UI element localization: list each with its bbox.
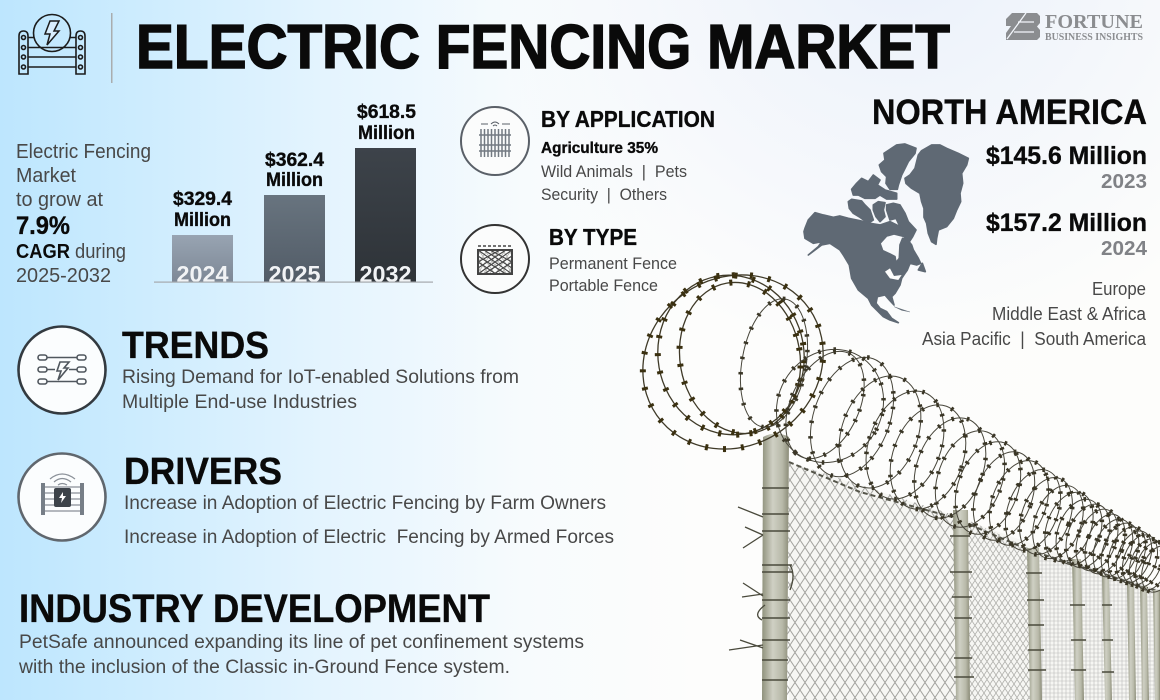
bar 2025: Million bbox=[266, 170, 323, 191]
by application text: Wild Animals | Pets bbox=[541, 162, 687, 181]
other regions: Middle East & Africa bbox=[992, 304, 1147, 324]
logo: Fortune Business Insights: FORTUNE bbox=[1045, 11, 1143, 33]
CAGR text block: 2025-2032 bbox=[16, 265, 111, 287]
by application text: BY APPLICATION bbox=[541, 106, 715, 132]
bar chart bbox=[154, 102, 433, 287]
North America stats: $157.2 Million bbox=[986, 209, 1147, 237]
North America stats: $145.6 Million bbox=[986, 142, 1147, 170]
CAGR text block: CAGR during bbox=[16, 241, 126, 263]
North America stats: 2024 bbox=[1101, 238, 1148, 260]
trends text: Rising Demand for IoT-enabled Solutions from bbox=[122, 366, 519, 388]
bar 2024: $329.4 bbox=[173, 189, 232, 210]
by type text bbox=[549, 224, 677, 295]
icon: by type bbox=[461, 225, 529, 293]
by application text: Security | Others bbox=[541, 185, 667, 204]
North America stats bbox=[872, 93, 1148, 260]
other regions: Europe bbox=[1092, 279, 1146, 299]
bar 2032: Million bbox=[358, 123, 415, 144]
fence photo illustration bbox=[609, 240, 1160, 700]
industry development: with the inclusion of the Classic in-Ground Fence system. bbox=[18, 656, 510, 678]
bar 2025 bbox=[264, 150, 325, 287]
drivers text: Increase in Adoption of Electric Fencing by Farm Owners bbox=[124, 492, 606, 514]
logo: Fortune Business Insights: BUSINESS INSIGHTS bbox=[1045, 32, 1143, 43]
by type text: Portable Fence bbox=[549, 276, 658, 295]
industry development: PetSafe announced expanding its line of pet confinement systems bbox=[19, 631, 584, 653]
bar 2032: $618.5 bbox=[357, 102, 416, 123]
icon: by application bbox=[461, 107, 529, 175]
other regions bbox=[922, 279, 1147, 349]
bar 2024: Million bbox=[174, 210, 231, 231]
industry development: INDUSTRY DEVELOPMENT bbox=[19, 587, 490, 631]
icon: electric fence bbox=[19, 14, 85, 74]
North America stats: NORTH AMERICA bbox=[872, 93, 1147, 132]
trends text: Multiple End-use Industries bbox=[122, 391, 357, 413]
bar 2025: 2025 bbox=[268, 261, 321, 287]
drivers text: DRIVERS bbox=[124, 451, 282, 493]
industry development bbox=[18, 587, 584, 678]
bar 2024 bbox=[172, 189, 233, 287]
logo: Fortune Business Insights bbox=[1006, 11, 1143, 43]
trends text bbox=[122, 325, 519, 413]
fence posts bbox=[729, 434, 1160, 700]
bar 2032: 2032 bbox=[360, 261, 412, 287]
by application text bbox=[541, 106, 715, 204]
icon: trends bbox=[18, 326, 106, 414]
icon: drivers bbox=[18, 454, 106, 540]
bar 2032 bbox=[355, 102, 416, 287]
CAGR text block bbox=[16, 141, 151, 287]
bar 2024: 2024 bbox=[176, 261, 229, 287]
map: North America bbox=[804, 144, 968, 323]
CAGR text block: 7.9% bbox=[16, 212, 70, 240]
other regions: Asia Pacific | South America bbox=[922, 329, 1147, 349]
drivers text: Increase in Adoption of Electric Fencing by Armed Forces bbox=[124, 526, 614, 548]
razor wire coils bbox=[609, 240, 1160, 597]
title: ELECTRIC FENCING MARKET bbox=[136, 13, 950, 82]
drivers text bbox=[124, 451, 614, 548]
CAGR text block: Electric Fencing bbox=[16, 141, 151, 163]
bar 2025: $362.4 bbox=[265, 150, 324, 171]
CAGR text block: to grow at bbox=[16, 189, 103, 211]
CAGR text block: Market bbox=[16, 165, 76, 187]
trends text: TRENDS bbox=[122, 325, 269, 367]
fence mesh bbox=[787, 462, 1160, 700]
North America stats: 2023 bbox=[1101, 171, 1147, 193]
by type text: BY TYPE bbox=[549, 224, 637, 250]
by application text: Agriculture 35% bbox=[541, 140, 658, 157]
by type text: Permanent Fence bbox=[549, 254, 677, 273]
